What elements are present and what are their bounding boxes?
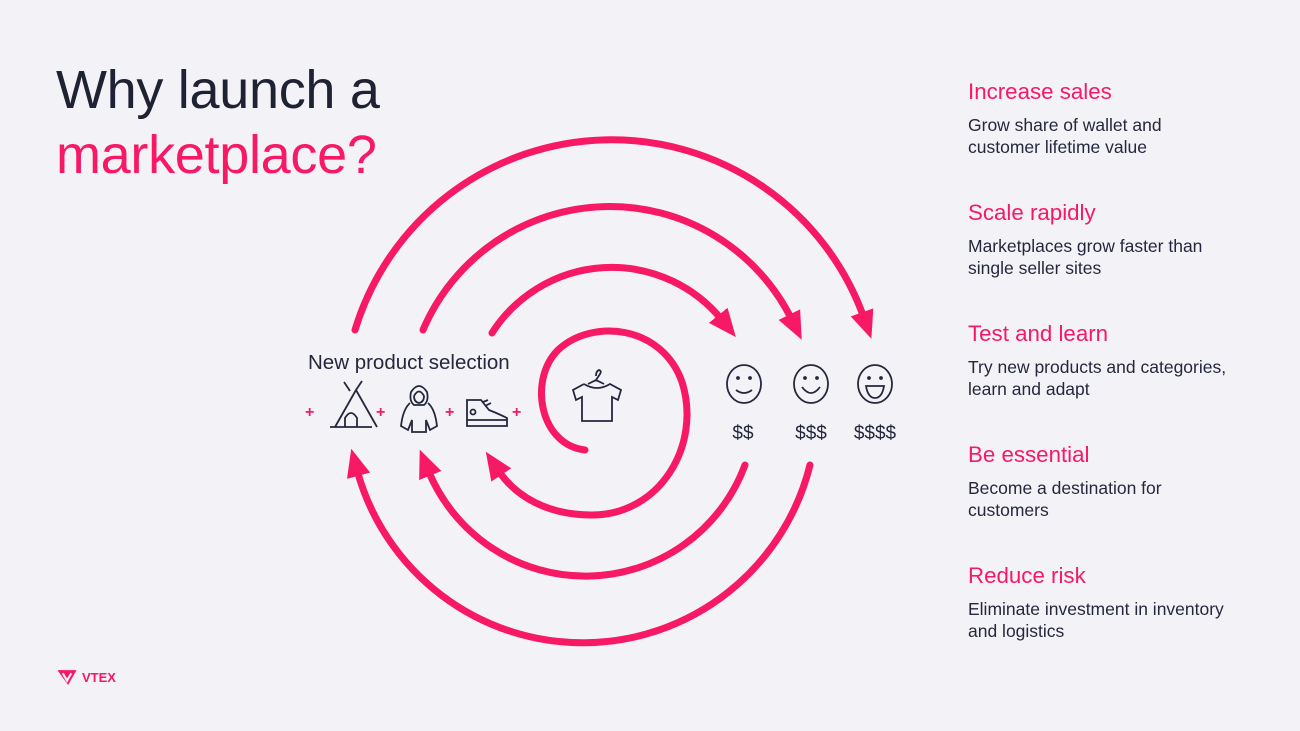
plus signs: + (376, 404, 385, 421)
side benefits list (968, 79, 1226, 641)
benefit: reduce risk: Reduce risk (968, 563, 1086, 588)
icon: sneaker (467, 400, 507, 426)
benefit: reduce risk: Eliminate investment in inventory (968, 599, 1224, 619)
benefit: test and learn: Test and learn (968, 321, 1108, 346)
benefit: increase sales: customer lifetime value (968, 137, 1147, 157)
price labels: $$$ (795, 423, 827, 444)
benefit: be essential: Be essential (968, 442, 1089, 467)
icon: smiley 3 (858, 365, 892, 403)
benefit: scale rapidly: Scale rapidly (968, 200, 1096, 225)
benefit: test and learn: Try new products and categories, (968, 357, 1226, 377)
benefit: scale rapidly: single seller sites (968, 258, 1101, 278)
label: new product selection: New product selection (308, 351, 510, 374)
benefit: be essential: customers (968, 500, 1049, 520)
plus signs (305, 404, 521, 421)
logo: VTEX: VTEX (82, 670, 116, 685)
benefit: scale rapidly (968, 200, 1202, 278)
benefit: reduce risk (968, 563, 1224, 641)
benefit: increase sales (968, 79, 1162, 157)
icon: smiley 1 (727, 365, 761, 403)
icon: t-shirt on hanger (573, 370, 621, 421)
benefit: test and learn: learn and adapt (968, 379, 1090, 399)
benefit: increase sales: Grow share of wallet and (968, 115, 1162, 135)
icon: tent (330, 381, 377, 427)
benefit: increase sales: Increase sales (968, 79, 1112, 104)
arcs (355, 140, 864, 643)
logo: VTEX (58, 670, 116, 685)
title: marketplace? (56, 125, 377, 185)
price labels (732, 423, 897, 444)
title: Why launch a (56, 60, 380, 120)
price labels: $$ (732, 423, 754, 444)
benefit: be essential (968, 442, 1162, 520)
plus signs: + (445, 404, 454, 421)
price labels: $$$$ (854, 423, 897, 444)
icon: smiley 2 (794, 365, 828, 403)
plus signs: + (512, 404, 521, 421)
plus signs: + (305, 404, 314, 421)
benefit: test and learn (968, 321, 1226, 399)
benefit: reduce risk: and logistics (968, 621, 1064, 641)
benefit: scale rapidly: Marketplaces grow faster than (968, 236, 1202, 256)
benefit: be essential: Become a destination for (968, 478, 1162, 498)
icon: hoodie (401, 386, 437, 432)
title (56, 60, 380, 185)
